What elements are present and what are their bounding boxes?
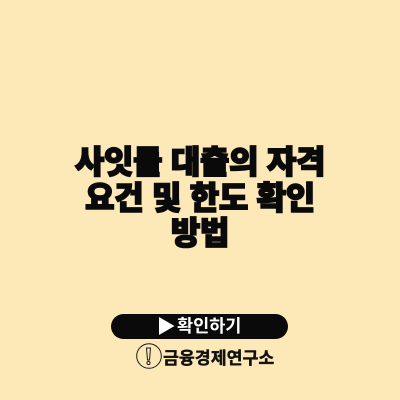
icon: play triangle [159,317,174,335]
title: 방법 [171,215,229,251]
icon: exclamation circle [136,343,162,369]
button: 확인하기 [111,314,288,339]
title [74,144,325,251]
button label: 확인하기 [177,316,241,336]
brand row [136,343,274,369]
title: 사잇돌 대출의 자격 [75,144,325,180]
brand name: 금융경제연구소 [163,348,274,368]
title: 요건 및 한도 확인 [85,180,315,216]
